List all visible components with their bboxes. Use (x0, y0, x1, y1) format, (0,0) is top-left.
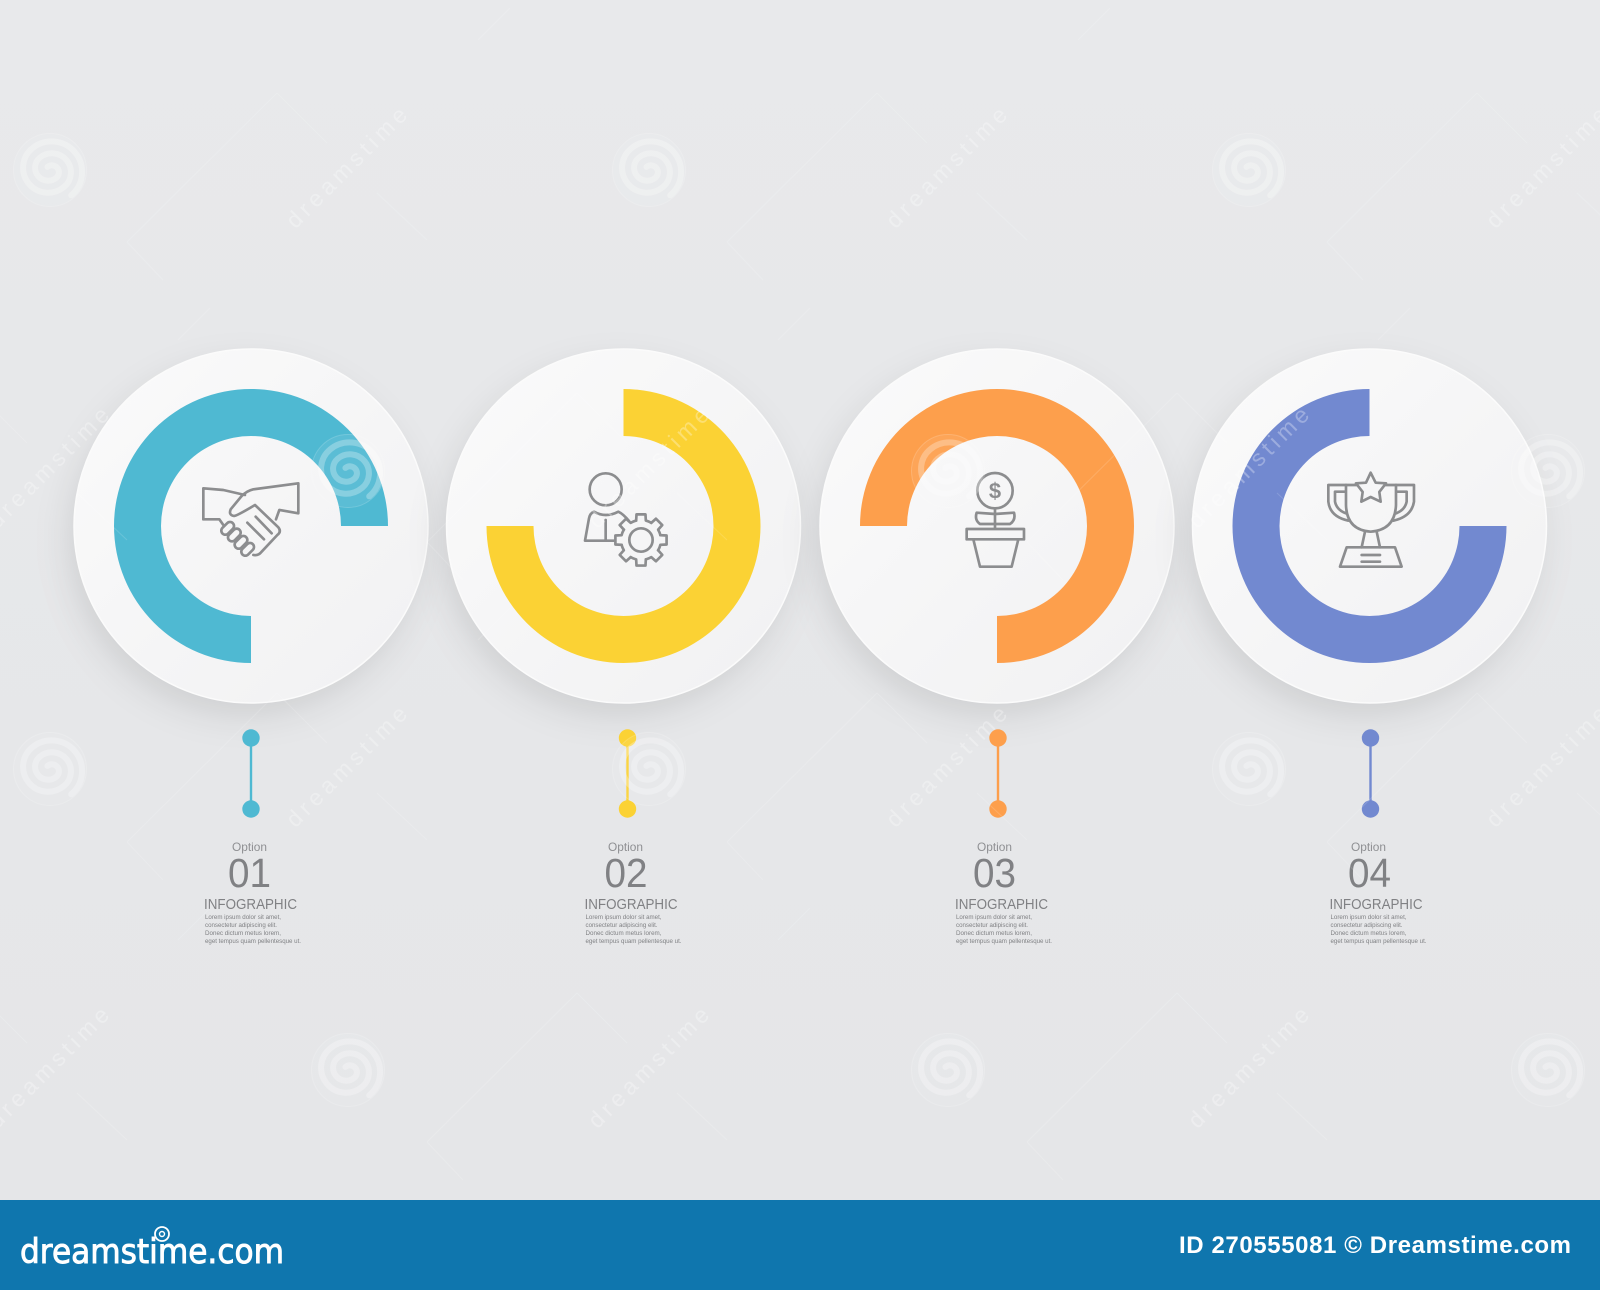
text block: option 1: Donec dictum metus lorem, (205, 930, 281, 937)
text block: option 2: Lorem ipsum dolor sit amet, (586, 914, 662, 921)
watermark layer: dreamstime (281, 701, 412, 832)
watermark layer: dreamstime (583, 402, 714, 533)
icon: person with gear (585, 473, 667, 566)
footer logo: dreamstime.com (20, 1232, 284, 1272)
connector: option 4 (1362, 729, 1379, 818)
text block: option 1: eget tempus quam pellentesque ut. (205, 938, 301, 945)
text block: option 2 (584, 840, 682, 945)
text block: option 1: INFOGRAPHIC (204, 896, 297, 913)
text block: option 4: eget tempus quam pellentesque ut. (1330, 938, 1427, 945)
text block: option 1: Lorem ipsum dolor sit amet, (205, 914, 281, 921)
ring: blue (1232, 389, 1506, 663)
text block: option 3: consectetur adipiscing elit. (956, 922, 1028, 929)
text block: option 2: consectetur adipiscing elit. (586, 922, 658, 929)
text block: option 4: 04 (1348, 850, 1391, 896)
text block: option 4: Lorem ipsum dolor sit amet, (1330, 914, 1407, 921)
ring: yellow (486, 389, 760, 663)
text block: option 3 (955, 840, 1052, 945)
panel: option 3 circle (815, 349, 1174, 716)
connector: option 1 (242, 729, 260, 818)
text block: option 4: consectetur adipiscing elit. (1330, 922, 1403, 929)
panel: option 4 circle (1188, 349, 1546, 716)
icon: money plant (967, 473, 1024, 567)
watermark layer: dreamstime (881, 102, 1012, 233)
text block: option 4: INFOGRAPHIC (1330, 896, 1423, 913)
text block: option 2: eget tempus quam pellentesque ut. (586, 938, 682, 945)
watermark layer: dreamstime (881, 701, 1012, 832)
text block: option 1: consectetur adipiscing elit. (205, 922, 277, 929)
watermark layer: dreamstime (583, 1002, 714, 1133)
connector: option 2 (619, 729, 636, 818)
text block: option 4: Donec dictum metus lorem, (1330, 930, 1407, 937)
panel: option 2 circle (442, 349, 800, 716)
text block: option 3: Option (977, 840, 1012, 854)
panel: option 1 circle (69, 349, 428, 716)
icon: handshake (203, 483, 298, 557)
text block: option 2: INFOGRAPHIC (584, 896, 678, 913)
connector: option 3 (989, 729, 1007, 818)
watermark layer: dreamstime (281, 102, 412, 233)
ring: orange (860, 389, 1134, 663)
text block: option 1: Option (232, 840, 267, 854)
footer image id: ID 270555081 © Dreamstime.com (1179, 1232, 1571, 1259)
text block: option 3: INFOGRAPHIC (955, 896, 1048, 913)
text block: option 3: Lorem ipsum dolor sit amet, (956, 914, 1032, 921)
text block: option 1: 01 (228, 850, 271, 896)
icon: trophy (1328, 473, 1414, 567)
text block: option 2: 02 (604, 850, 648, 896)
icon: money plant: $ (989, 479, 1001, 504)
text block: option 4: Option (1351, 840, 1386, 854)
text block: option 2: Option (608, 840, 643, 854)
text block: option 3: eget tempus quam pellentesque ut. (956, 938, 1052, 945)
text block: option 3: Donec dictum metus lorem, (956, 930, 1032, 937)
watermark layer: dreamstime (1183, 402, 1314, 533)
text block: option 4 (1330, 840, 1427, 945)
footer bar (0, 1200, 1600, 1290)
ring: teal (114, 389, 388, 663)
text block: option 1 (204, 840, 301, 945)
text block: option 3: 03 (973, 850, 1016, 896)
text block: option 2: Donec dictum metus lorem, (586, 930, 662, 937)
watermark layer: dreamstime (1183, 1002, 1314, 1133)
